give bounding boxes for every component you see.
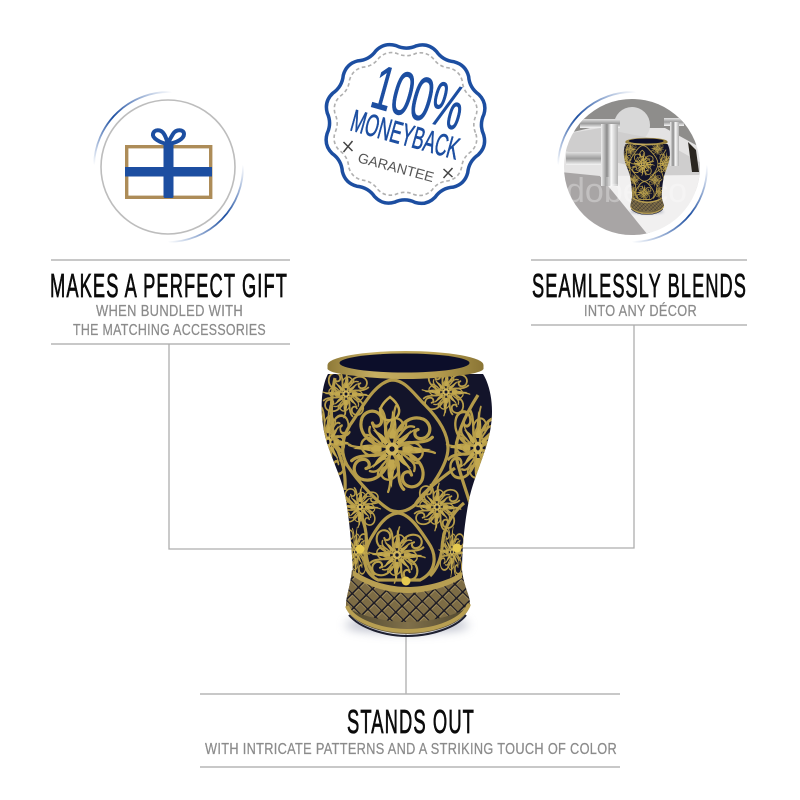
band (353, 570, 462, 593)
leader lines (169, 325, 634, 694)
body (322, 374, 492, 588)
text: when bundled with the matching accessories: WHEN BUNDLED WITH (96, 303, 243, 320)
badge: 100% moneyback garantee (314, 33, 497, 215)
panel: seamlessly blends (531, 92, 747, 325)
badge: 100% moneyback garantee: 100% (365, 53, 472, 144)
base with lattice (346, 570, 470, 636)
text: into any decor: INTO ANY DÉCOR (584, 303, 697, 320)
text: when bundled with the matching accessories (73, 303, 266, 339)
photo: vase on bathroom counter (558, 92, 707, 242)
callout dots (356, 544, 462, 586)
rim (328, 351, 484, 379)
product: ornate navy and gold vase (305, 351, 509, 636)
heading: makes a perfect gift: MAKES A PERFECT GIFT (50, 267, 288, 304)
badge: 100% moneyback garantee: GARANTEE (356, 149, 436, 185)
infographic canvas (51, 42, 747, 768)
badge: 100% moneyback garantee: MONEYBACK (347, 103, 464, 166)
photo: vase on bathroom counter: dobe.co (566, 172, 687, 210)
panel: makes a perfect gift (50, 92, 290, 344)
panel: stands out (200, 694, 620, 767)
text: when bundled with the matching accessories: THE MATCHING ACCESSORIES (73, 322, 266, 339)
text: with intricate patterns: WITH INTRICATE PATTERNS AND A STRIKING TOUCH OF COLOR (205, 741, 617, 758)
heading: stands out: STANDS OUT (347, 703, 475, 740)
icon: gift in circle (94, 92, 243, 242)
decorative rule (51, 259, 290, 261)
